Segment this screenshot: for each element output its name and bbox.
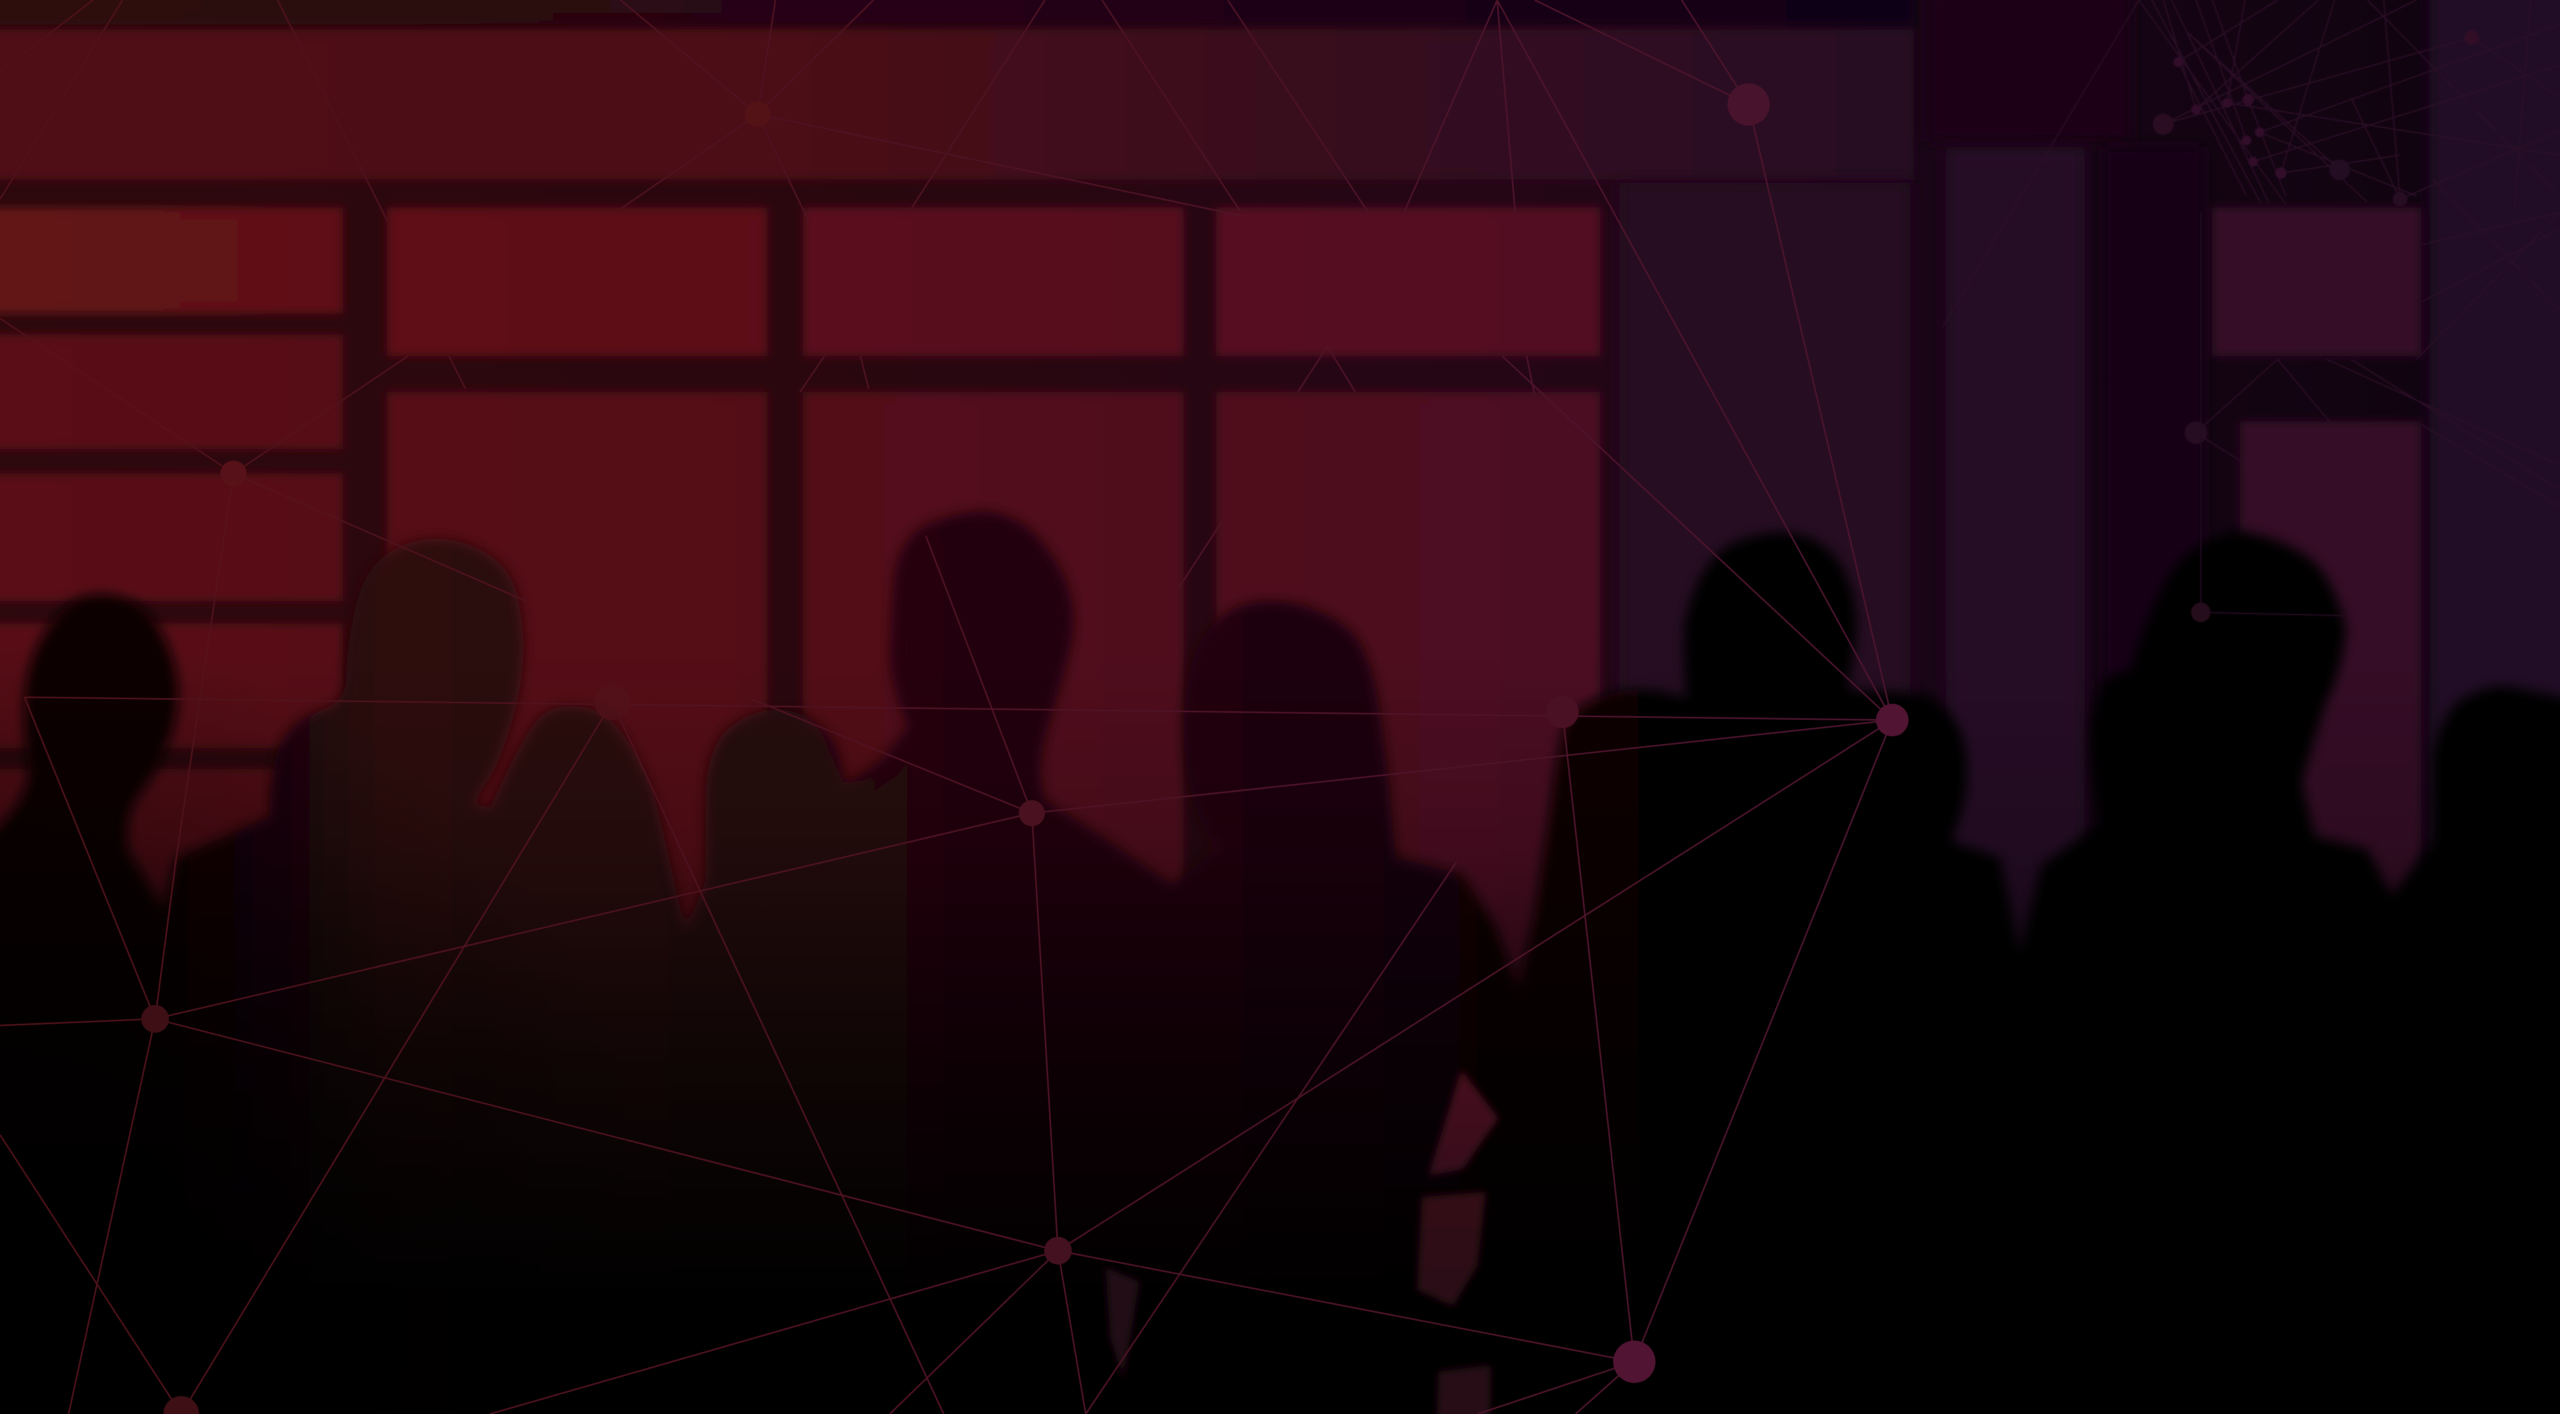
people silhouettes [0,511,2560,1414]
bottom darkening [0,620,2560,1414]
light gaps between figures [1105,1069,1499,1414]
windows [0,207,2421,1074]
main network lines [0,0,1892,1414]
distant network tangle [1943,0,2560,622]
main network nodes [141,83,1909,1414]
